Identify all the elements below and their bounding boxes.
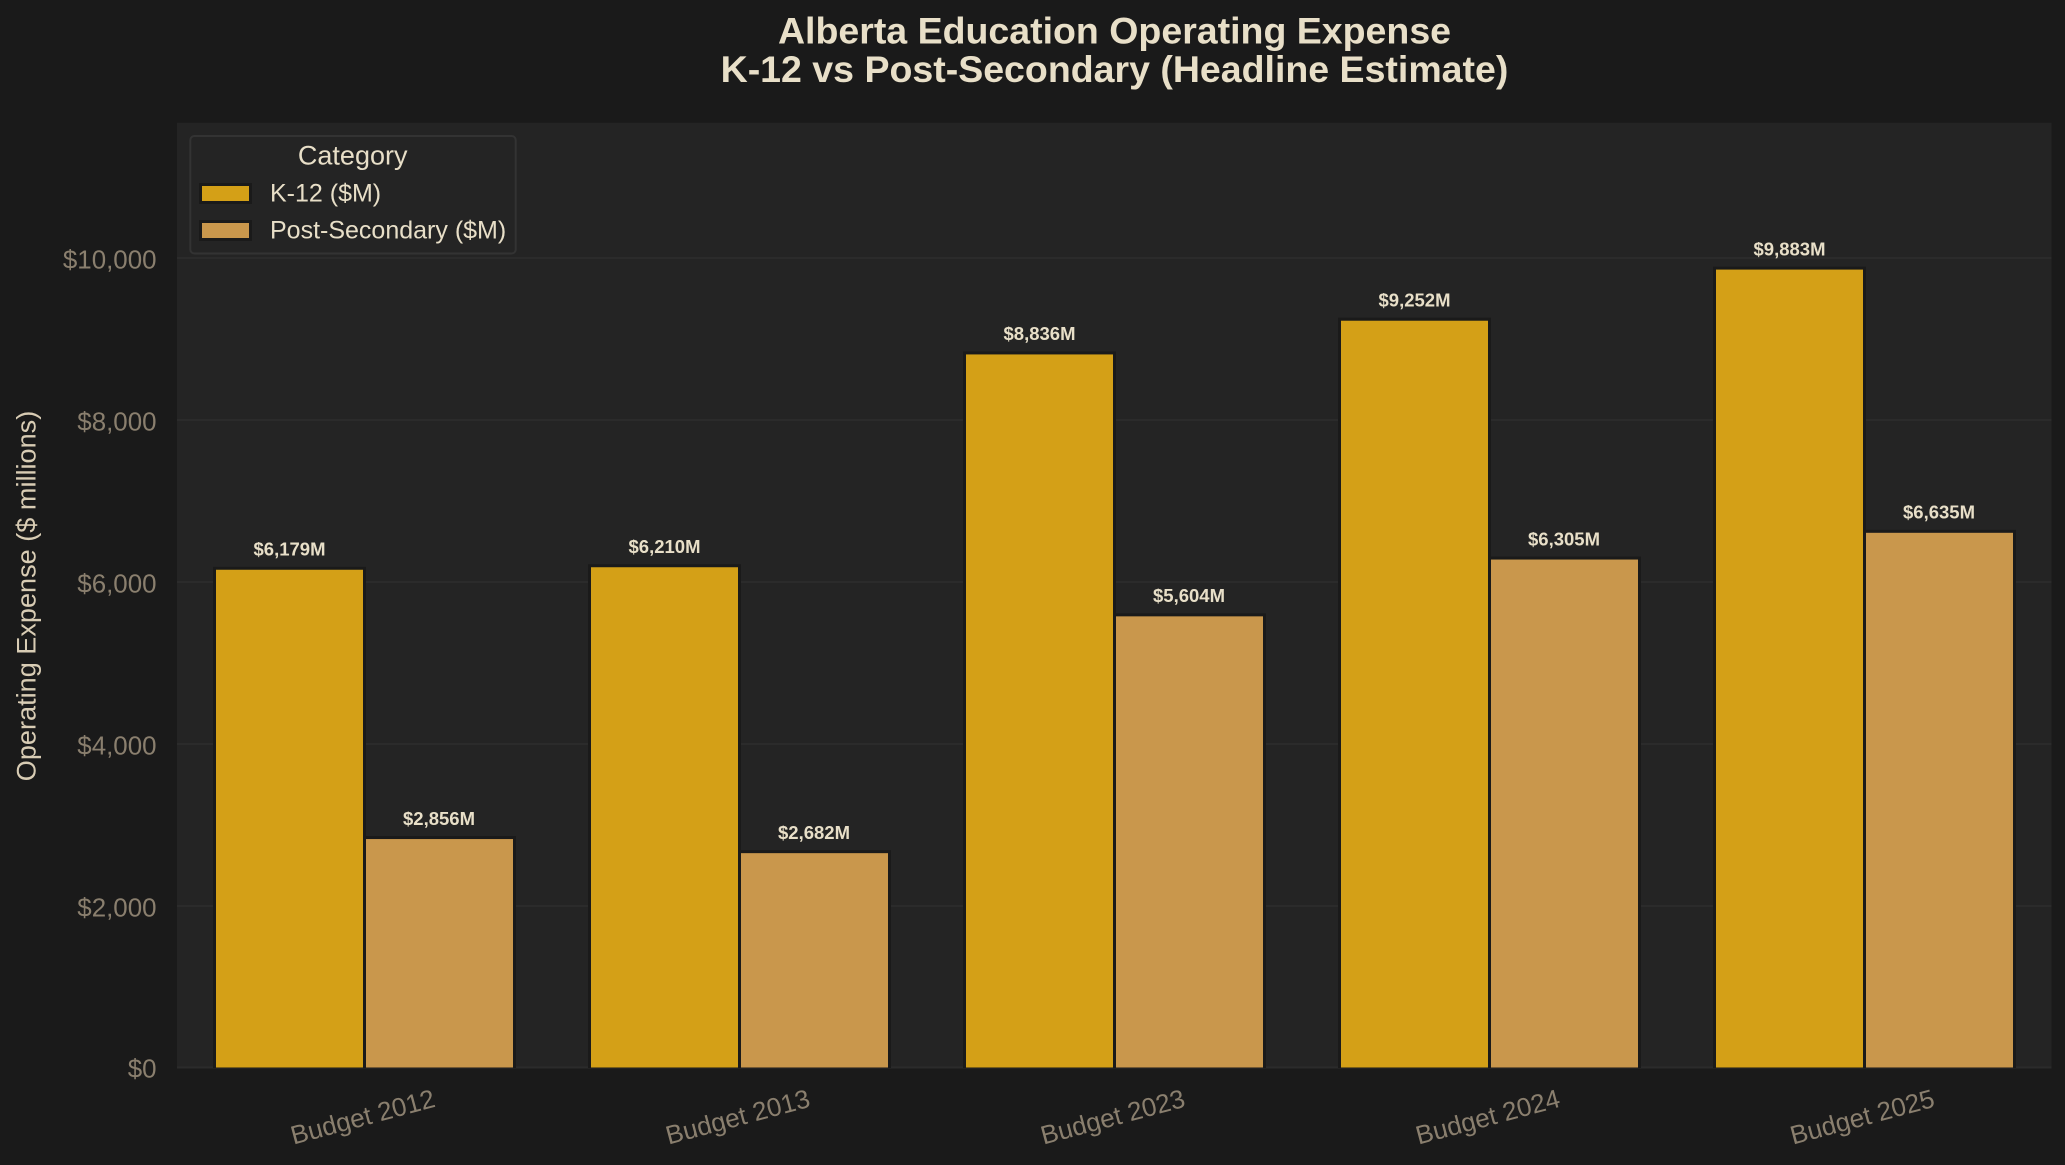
x-axis tick labels: Budget 2012 [287, 1083, 438, 1150]
group: Budget 2025 [1714, 238, 2014, 1069]
group: Budget 2025: $6,635M [1903, 502, 1975, 522]
group: Budget 2012 [214, 538, 514, 1069]
legend item: Post-Secondary: Post-Secondary ($M) [270, 216, 506, 244]
y-axis tick labels: $0 [128, 1056, 156, 1084]
y-axis tick labels: $2,000 [77, 895, 156, 923]
legend [190, 136, 516, 254]
group: Budget 2025: $9,883M [1754, 238, 1826, 260]
y-axis tick labels: $10,000 [63, 246, 156, 274]
group: Budget 2023: $8,836M [1004, 323, 1076, 344]
title [721, 9, 1508, 90]
group: Budget 2013: $2,682M [778, 822, 850, 843]
group: Budget 2023 [964, 323, 1264, 1069]
title: K-12 vs Post-Secondary (Headline Estimate) [721, 48, 1508, 90]
x-axis tick labels [287, 1083, 1938, 1150]
group: Budget 2012: $2,856M [403, 808, 475, 829]
group: Budget 2024: $6,305M [1528, 528, 1600, 549]
y-axis title: Operating Expense ($ millions) [10, 411, 42, 781]
group: Budget 2012: $6,179M [254, 538, 326, 560]
title: Alberta Education Operating Expense [778, 9, 1451, 51]
x-axis tick labels: Budget 2025 [1787, 1083, 1938, 1150]
legend item: K-12 [200, 180, 381, 208]
legend title: Category [298, 140, 408, 170]
y-axis tick labels: $8,000 [77, 408, 156, 436]
x-axis tick labels: Budget 2024 [1412, 1083, 1563, 1150]
group: Budget 2013: $6,210M [628, 536, 700, 557]
x-axis tick labels: Budget 2013 [662, 1083, 813, 1150]
y-axis tick labels: $6,000 [77, 570, 156, 598]
group: Budget 2023: $5,604M [1153, 585, 1225, 606]
panel: plot area [177, 123, 2052, 1068]
x-axis tick labels: Budget 2023 [1037, 1083, 1188, 1150]
group: Budget 2024: $9,252M [1378, 290, 1450, 310]
bar chart: grouped bars [214, 238, 2014, 1069]
group: Budget 2013 [590, 536, 890, 1069]
legend item: K-12: K-12 ($M) [270, 180, 381, 208]
group: Budget 2024 [1340, 290, 1640, 1069]
y-axis tick labels [63, 246, 156, 1084]
y-axis tick labels: $4,000 [77, 732, 156, 760]
